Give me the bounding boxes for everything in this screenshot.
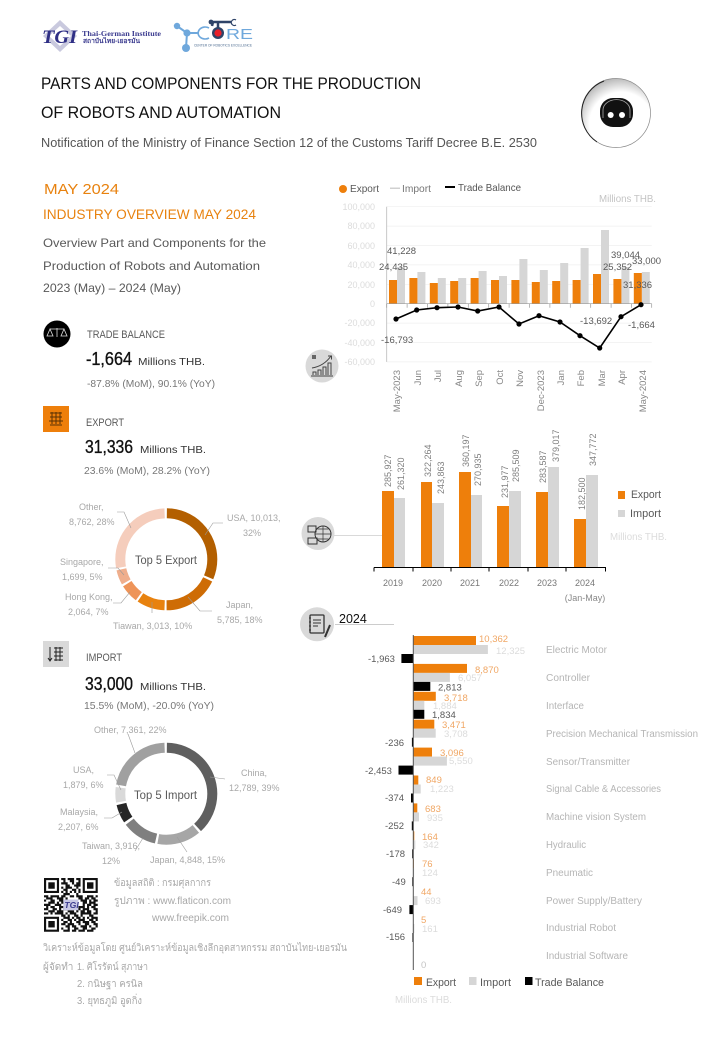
chart: products 2024: 3,096 bbox=[440, 748, 464, 759]
icon: export bbox=[43, 406, 69, 432]
block: trade balance: -87.8% (MoM), 90.1% (YoY) bbox=[87, 378, 215, 390]
chart: products 2024: -156 bbox=[386, 932, 405, 943]
chart: products 2024: Signal Cable & Accessories bbox=[546, 784, 661, 795]
chart: monthly export, import, trade balance: 80,000 bbox=[347, 221, 375, 231]
donut: top 5 import: Japan, 4,848, 15% bbox=[150, 855, 225, 865]
chart legend: yearly: Export bbox=[631, 489, 661, 501]
title bbox=[41, 75, 421, 122]
sources: ข้อมูลสถิติ : กรมศุลกากร bbox=[114, 877, 212, 889]
subtitle: Notification of the Ministry of Finance Section 12 of the Customs Tariff Decree B.E. 2530 bbox=[41, 136, 537, 150]
logo: CORE: CENTER OF ROBOTICS EXCELLENCE bbox=[194, 44, 253, 48]
donut: top 5 import: 12,789, 39% bbox=[229, 783, 280, 793]
donut: top 5 export bbox=[60, 502, 281, 631]
donut: top 5 import: Taiwan, 3,916, bbox=[82, 841, 140, 851]
chart: products 2024: 935 bbox=[427, 813, 443, 824]
icon: notebook bbox=[300, 607, 334, 641]
chart: products 2024: 76 bbox=[422, 859, 433, 870]
analyst credits: วิเคราะห์ข้อมูลโดย ศูนย์วิเคราะห์ข้อมูลเชิงลึกอุตสาหกรรม สถาบันไทย-เยอรมัน bbox=[43, 941, 347, 954]
block: import: 15.5% (MoM), -20.0% (YoY) bbox=[84, 700, 214, 712]
chart legend: monthly: Trade Balance bbox=[458, 182, 521, 194]
QR code: TGI bbox=[64, 900, 79, 910]
chart: products 2024: Pneumatic bbox=[546, 868, 593, 879]
chart legend: yearly bbox=[618, 489, 661, 520]
heading: 2024 bbox=[335, 612, 394, 626]
chart: monthly export, import, trade balance: 0 bbox=[370, 299, 375, 309]
chart: yearly export and import: 283,587 bbox=[538, 450, 548, 483]
chart: monthly export, import, trade balance: May-2024 bbox=[638, 370, 649, 412]
logo: Thai-German Institute bbox=[42, 20, 162, 52]
chart legend: monthly: Export bbox=[350, 183, 379, 195]
chart: products 2024: Industrial Software bbox=[546, 951, 628, 962]
block: export bbox=[84, 417, 210, 477]
chart: products 2024: -49 bbox=[392, 877, 406, 888]
block: trade balance: TRADE BALANCE bbox=[87, 329, 165, 341]
donut: top 5 import: Other, 7,361, 22% bbox=[94, 725, 167, 735]
unit label products: Millions THB. bbox=[395, 994, 452, 1006]
chart legend: monthly bbox=[339, 182, 521, 195]
chart: products 2024: -1,963 bbox=[368, 654, 395, 665]
block: import: Millions THB. bbox=[140, 681, 206, 693]
chart: products 2024: Electric Motor bbox=[546, 645, 608, 656]
chart: monthly export, import, trade balance: Jan bbox=[556, 370, 567, 385]
heading: May 2024: MAY 2024 bbox=[44, 181, 119, 198]
chart: yearly export and import: 285,509 bbox=[511, 449, 521, 482]
donut: top 5 import: USA, bbox=[73, 765, 94, 775]
chart: monthly export, import, trade balance: 100,000 bbox=[342, 202, 375, 212]
chart: monthly export, import, trade balance: -60,000 bbox=[344, 357, 375, 367]
chart: yearly export and import: (Jan-May) bbox=[565, 593, 605, 603]
chart: products 2024: -236 bbox=[385, 738, 404, 749]
unit label: Millions THB. bbox=[599, 193, 656, 205]
chart: products 2024: 1,223 bbox=[430, 784, 454, 795]
overview text: Production of Robots and Automation bbox=[43, 259, 260, 273]
chart legend: products: Import bbox=[480, 977, 511, 989]
sources: www.freepik.com bbox=[151, 913, 229, 924]
donut: top 5 import: 2,207, 6% bbox=[58, 822, 99, 832]
overview text bbox=[43, 236, 266, 295]
chart legend: monthly: Import bbox=[402, 183, 431, 195]
chart: products 2024: 10,362 bbox=[479, 634, 508, 645]
chart: products 2024: 3,718 bbox=[444, 693, 468, 704]
chart: products 2024: 44 bbox=[421, 887, 432, 898]
chart: yearly export and import: 2022 bbox=[499, 578, 519, 588]
chart: monthly export, import, trade balance: Oct bbox=[495, 370, 506, 385]
chart: monthly export, import, trade balance: -1,664 bbox=[628, 320, 655, 331]
chart: monthly export, import, trade balance: May-2023 bbox=[392, 370, 403, 412]
chart: products 2024: -649 bbox=[383, 905, 402, 916]
chart: monthly export, import, trade balance: Nov bbox=[515, 370, 526, 387]
icon: trade balance bbox=[44, 320, 70, 348]
chart: products 2024: 161 bbox=[422, 924, 438, 935]
donut: top 5 export: Japan, bbox=[226, 600, 253, 610]
chart: monthly export, import, trade balance: Mar bbox=[597, 370, 608, 386]
chart: products 2024: Precision Mechanical Transmission bbox=[546, 729, 698, 740]
chart: products 2024: 8,870 bbox=[475, 665, 499, 676]
chart: products 2024: 6,057 bbox=[458, 673, 482, 684]
logo: Thai-German Institute: สถาบันไทย-เยอรมัน bbox=[83, 36, 141, 45]
block: export: Millions THB. bbox=[140, 444, 206, 456]
title: PARTS AND COMPONENTS FOR THE PRODUCTION bbox=[41, 75, 421, 93]
chart: monthly export, import, trade balance: Feb bbox=[576, 370, 587, 386]
chart: products 2024: Controller bbox=[546, 673, 591, 684]
chart: monthly export, import, trade balance bbox=[342, 202, 661, 412]
chart: products 2024: 342 bbox=[423, 840, 439, 851]
chart: monthly export, import, trade balance: Jul bbox=[433, 370, 444, 382]
chart: products 2024: 1,834 bbox=[432, 710, 456, 721]
block: trade balance: -1,664 bbox=[86, 349, 132, 369]
chart: products 2024: -252 bbox=[385, 821, 404, 832]
chart: yearly export and import: 2023 bbox=[537, 578, 557, 588]
chart: yearly export and import: 231,977 bbox=[500, 465, 510, 498]
donut: top 5 export: 5,785, 18% bbox=[217, 615, 263, 625]
chart legend: yearly: Import bbox=[630, 508, 661, 520]
donut: top 5 import: 12% bbox=[102, 856, 120, 866]
title: OF ROBOTS AND AUTOMATION bbox=[41, 104, 281, 122]
chart: products 2024: 12,325 bbox=[496, 646, 525, 657]
analyst credits: 3. ยุทธภูมิ อูดกิ่ง bbox=[77, 993, 142, 1007]
icon: robot bbox=[582, 78, 650, 148]
block: trade balance bbox=[86, 329, 215, 390]
chart: products 2024: 1,884 bbox=[433, 701, 457, 712]
donut: top 5 import bbox=[58, 725, 280, 866]
logo: Thai-German Institute: TGI bbox=[42, 27, 78, 48]
overview text: Overview Part and Components for the bbox=[43, 236, 266, 250]
chart: yearly export and import bbox=[374, 429, 606, 603]
chart: products 2024: Hydraulic bbox=[546, 840, 586, 851]
analyst credits bbox=[43, 941, 347, 1007]
chart: yearly export and import: 2024 bbox=[575, 578, 595, 588]
donut: top 5 export: Hong Kong, bbox=[65, 592, 113, 602]
chart: monthly export, import, trade balance: 39,044 bbox=[611, 250, 640, 261]
sources bbox=[114, 877, 231, 924]
chart: yearly export and import: 2021 bbox=[460, 578, 480, 588]
chart: yearly export and import: 285,927 bbox=[383, 454, 393, 487]
chart: yearly export and import: 322,264 bbox=[423, 444, 433, 477]
donut: top 5 export: 1,699, 5% bbox=[62, 572, 103, 582]
chart: monthly export, import, trade balance: 60,000 bbox=[347, 241, 375, 251]
icon: import bbox=[43, 641, 69, 667]
QR code bbox=[44, 878, 98, 932]
donut: top 5 export: USA, 10,013, bbox=[227, 513, 281, 523]
analyst credits: 2. กนิษฐา ครนิล bbox=[77, 979, 143, 990]
chart: yearly export and import: 261,320 bbox=[396, 457, 406, 490]
analyst credits: ผู้จัดทำ bbox=[43, 961, 73, 973]
chart: yearly export and import: 270,935 bbox=[473, 453, 483, 486]
chart: monthly export, import, trade balance: -40,000 bbox=[344, 338, 375, 348]
donut: top 5 import: Malaysia, bbox=[60, 807, 98, 817]
donut: top 5 import: Top 5 Import bbox=[134, 788, 198, 802]
chart: monthly export, import, trade balance: Jun bbox=[413, 370, 424, 385]
block: export: 31,336 bbox=[85, 437, 133, 457]
donut: top 5 export: Top 5 Export bbox=[135, 553, 198, 567]
block: export: 23.6% (MoM), 28.2% (YoY) bbox=[84, 465, 210, 477]
block: import: IMPORT bbox=[86, 652, 122, 664]
icon: growth chart bbox=[306, 350, 338, 382]
chart: monthly export, import, trade balance: 24,435 bbox=[379, 262, 408, 273]
chart: yearly export and import: 243,863 bbox=[436, 461, 446, 494]
block: trade balance: Millions THB. bbox=[138, 356, 205, 368]
heading: industry overview: INDUSTRY OVERVIEW MAY 2024 bbox=[43, 207, 256, 222]
chart: products 2024: 849 bbox=[426, 775, 442, 786]
donut: top 5 export: 32% bbox=[243, 528, 261, 538]
chart: monthly export, import, trade balance: -20,000 bbox=[344, 318, 375, 328]
logo: CORE: RE bbox=[226, 26, 253, 43]
chart: monthly export, import, trade balance: 25,352 bbox=[603, 262, 632, 273]
chart: products 2024: Sensor/Transmitter bbox=[546, 757, 631, 768]
chart: products 2024: -374 bbox=[385, 793, 404, 804]
chart: products 2024: 124 bbox=[422, 868, 438, 879]
chart: monthly export, import, trade balance: 31,336 bbox=[623, 280, 652, 291]
chart: monthly export, import, trade balance: 40,000 bbox=[347, 260, 375, 270]
chart: products 2024: 3,708 bbox=[444, 729, 468, 740]
donut: top 5 import: 1,879, 6% bbox=[63, 780, 104, 790]
chart: yearly export and import: 2020 bbox=[422, 578, 442, 588]
chart: monthly export, import, trade balance: Aug bbox=[454, 370, 465, 387]
donut: top 5 export: Other, bbox=[79, 502, 104, 512]
chart: yearly export and import: 379,017 bbox=[551, 429, 561, 462]
chart: products 2024: 5,550 bbox=[449, 756, 473, 767]
chart: products 2024: Machine vision System bbox=[546, 812, 646, 823]
donut: top 5 export: Singapore, bbox=[60, 557, 104, 567]
chart: monthly export, import, trade balance: 41,228 bbox=[387, 246, 416, 257]
analyst credits: 1. ศิโรรัตน์ สุภาษา bbox=[77, 960, 148, 973]
chart: monthly export, import, trade balance: Apr bbox=[617, 370, 628, 385]
chart: monthly export, import, trade balance: Sep bbox=[474, 370, 485, 387]
donut: top 5 export: Tiawan, 3,013, 10% bbox=[113, 621, 192, 631]
chart: products 2024: 5 bbox=[421, 915, 426, 926]
chart: products 2024: Power Supply/Battery bbox=[546, 896, 642, 907]
donut: top 5 import: China, bbox=[241, 768, 267, 778]
chart: products 2024: 3,471 bbox=[442, 720, 466, 731]
chart: products 2024: 683 bbox=[425, 804, 441, 815]
chart legend: products bbox=[414, 977, 604, 989]
chart: monthly export, import, trade balance: -16,793 bbox=[381, 335, 413, 346]
block: import bbox=[84, 652, 214, 712]
chart: yearly export and import: 360,197 bbox=[461, 434, 471, 467]
sources: รูปภาพ : www.flaticon.com bbox=[114, 896, 231, 907]
overview text: 2023 (May) – 2024 (May) bbox=[43, 281, 181, 295]
chart: monthly export, import, trade balance: Dec-2023 bbox=[536, 370, 547, 411]
chart: products 2024: 693 bbox=[425, 896, 441, 907]
chart: monthly export, import, trade balance: 33,000 bbox=[632, 256, 661, 267]
logo: Thai-German Institute: Thai-German Institute bbox=[82, 29, 162, 38]
chart: yearly export and import: 182,500 bbox=[577, 477, 587, 510]
chart: products 2024: Industrial Robot bbox=[546, 923, 616, 934]
chart: yearly export and import: 347,772 bbox=[588, 433, 598, 466]
block: export: EXPORT bbox=[86, 417, 124, 429]
chart: products 2024: 2,813 bbox=[438, 682, 462, 694]
chart: yearly export and import: 2019 bbox=[383, 578, 403, 588]
chart: monthly export, import, trade balance: -13,692 bbox=[580, 316, 612, 327]
donut: top 5 export: 8,762, 28% bbox=[69, 517, 115, 527]
chart: products 2024: 0 bbox=[421, 960, 426, 971]
chart: products 2024 bbox=[365, 634, 698, 971]
chart: products 2024: -2,453 bbox=[365, 766, 392, 777]
block: import: 33,000 bbox=[85, 674, 133, 694]
logo: CORE bbox=[174, 20, 253, 52]
donut: top 5 export: 2,064, 7% bbox=[68, 607, 109, 617]
unit label yearly: Millions THB. bbox=[610, 531, 667, 543]
chart legend: products: Trade Balance bbox=[535, 977, 604, 989]
icon: globe and trucks bbox=[302, 517, 382, 550]
chart: products 2024: Interface bbox=[546, 701, 584, 712]
chart: monthly export, import, trade balance: 20,000 bbox=[347, 280, 375, 290]
chart legend: products: Export bbox=[426, 977, 456, 989]
heading: 2024: 2024 bbox=[339, 612, 367, 626]
chart: products 2024: 164 bbox=[422, 832, 438, 843]
chart: products 2024: -178 bbox=[386, 849, 405, 860]
